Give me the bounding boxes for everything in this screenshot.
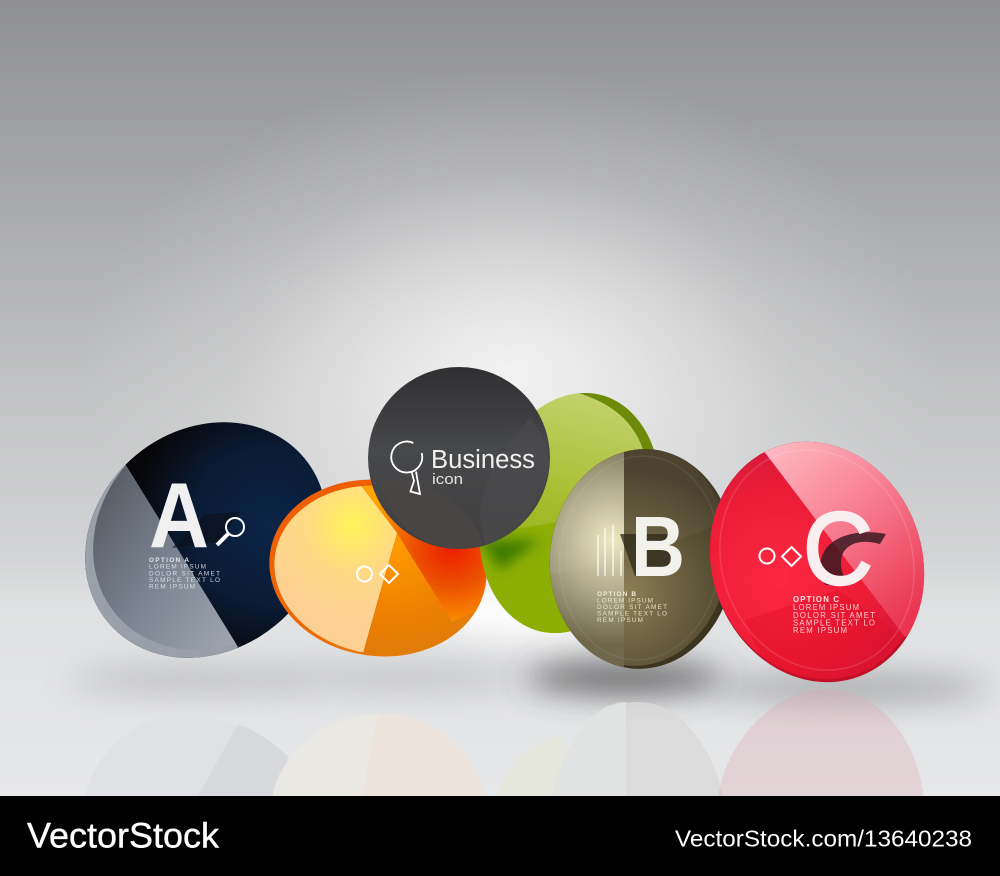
option C text: DOLOR SIT AMET: [793, 611, 875, 620]
icon: circle and diamond: [760, 547, 801, 566]
option C text: [793, 595, 875, 635]
option B text: REM IPSUM: [597, 617, 643, 624]
option A text: SAMPLE TEXT LO: [149, 577, 220, 584]
letter C: C: [803, 491, 873, 606]
Business text: Business: [431, 446, 535, 474]
orange rim: [258, 466, 498, 670]
C pink wedge: [764, 442, 924, 638]
circle green: [480, 393, 654, 633]
orange light wedge: [274, 486, 397, 652]
option C text: REM IPSUM: [793, 626, 847, 635]
reflections: [198, 689, 924, 796]
option C text: SAMPLE TEXT LO: [793, 618, 875, 628]
letter B: B: [631, 500, 685, 595]
option B text: LOREM IPSUM: [597, 598, 653, 604]
option B text: SAMPLE TEXT LO: [597, 610, 667, 618]
circle: Business icon badge: [368, 367, 550, 549]
option B text: OPTION B: [597, 591, 636, 598]
floor shadows: [70, 663, 990, 701]
option A text: [149, 557, 220, 590]
orange red wedge: [362, 486, 486, 622]
option A text: REM IPSUM: [149, 584, 195, 590]
option A text: DOLOR SIT AMET: [149, 570, 220, 577]
option C text: OPTION C: [793, 595, 839, 604]
circle B: olive: [550, 449, 723, 669]
option A text: LOREM IPSUM: [149, 564, 206, 571]
orange middle wedge: [369, 533, 442, 638]
icon: magnifier: [217, 518, 244, 545]
icon text: icon: [432, 472, 463, 488]
letter B shadow: [620, 534, 672, 576]
option B text: DOLOR SIT AMET: [597, 604, 667, 611]
letter A: A: [149, 464, 209, 568]
footer logo: VectorStock: [27, 816, 220, 856]
circle C: red: [710, 442, 924, 682]
circle A base: [37, 373, 375, 707]
footer bar: [0, 796, 1000, 876]
circle A gray wedge: [85, 465, 238, 658]
C lower facet: [745, 590, 905, 690]
C inner ring: [719, 450, 915, 671]
icon: key magnifier: [391, 442, 422, 494]
option A text: OPTION A: [149, 557, 189, 564]
footer url: VectorStock.com/13640238: [675, 826, 972, 852]
letter C shadow: [819, 532, 886, 585]
circle orange: [269, 480, 486, 656]
letter A shadow: [172, 512, 240, 548]
option B text: [597, 591, 667, 624]
option C text: LOREM IPSUM: [793, 603, 859, 612]
icon: vertical bars: [598, 525, 621, 576]
circle A: navy and gray: [85, 422, 322, 658]
icon: circle and diamond: [357, 565, 398, 583]
B inner ring: [560, 456, 716, 660]
